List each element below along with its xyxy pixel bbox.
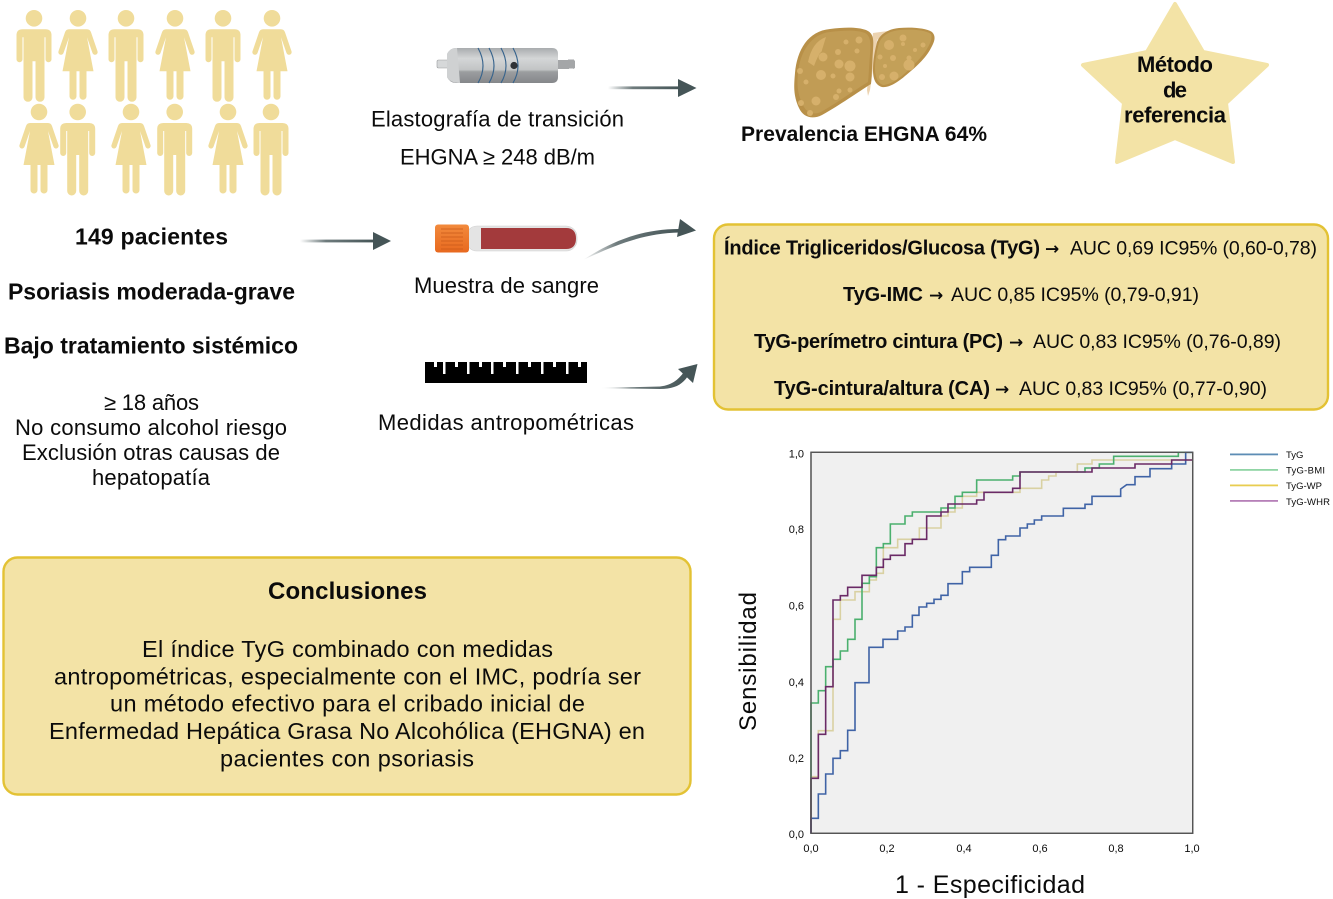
text: conclusions body: El índice TyG combinado con medidas [142, 636, 553, 662]
text: conclusions body: pacientes con psoriasis [220, 746, 474, 772]
text: conclusions body [49, 636, 645, 772]
text: exclusion criterion: Exclusión otras causas de [22, 440, 280, 465]
heading: conclusions: Conclusiones [268, 578, 427, 605]
x axis ticks: 0,2 [879, 843, 895, 855]
arrow: blood sample to indices [583, 219, 696, 260]
x axis ticks: 0,4 [956, 843, 972, 855]
star label: referencia [1124, 102, 1227, 128]
star label: de [1163, 78, 1187, 102]
text: NAFLD prevalence: Prevalencia EHGNA 64% [741, 123, 987, 146]
arrow: patients to blood sample [300, 232, 391, 250]
axis frame [811, 452, 1193, 833]
heading: patients: 149 pacientes [75, 224, 228, 250]
star label [1124, 52, 1227, 128]
icon: elastography transducer [437, 48, 575, 83]
result: TyG-IMC: → [929, 286, 943, 306]
y axis title: Sensibilidad [735, 592, 762, 731]
star label: Método [1137, 52, 1213, 77]
icon: woman 2 [155, 10, 195, 100]
panel: TyG index results [714, 224, 1328, 410]
x axis ticks: 1,0 [1184, 843, 1200, 855]
icon: woman 1 [58, 10, 98, 100]
text: conclusions body: antropométricas, especialmente con el IMC, podría ser [54, 664, 641, 690]
icon: woman 4 [19, 104, 59, 194]
y axis ticks: 0,6 [789, 600, 804, 612]
icon: man 4 [60, 104, 95, 195]
icon: man 3 [206, 10, 240, 102]
text: elastography label: EHGNA ≥ 248 dB/m [400, 144, 595, 170]
result: TyG-IMC [843, 284, 1199, 306]
arrow: anthropometrics to indices [600, 364, 698, 389]
arrow: elastography to liver [608, 79, 696, 97]
y axis ticks: 1,0 [789, 448, 804, 460]
y axis ticks: 0,2 [789, 753, 804, 765]
y axis ticks: 0,4 [789, 677, 804, 689]
legend item: TyG: TyG [1286, 450, 1303, 461]
x axis ticks [803, 843, 1200, 855]
result: TyG-CA: → [995, 380, 1009, 400]
icon: man 6 [254, 104, 288, 195]
icon: fatty liver [794, 28, 935, 117]
text: elastography label [371, 106, 624, 170]
icon: blood test tube [435, 224, 577, 252]
text: age criterion: ≥ 18 años [104, 390, 199, 415]
result: TyG: Índice Trigliceridos/Glucosa (TyG) [724, 236, 1040, 260]
y axis ticks: 0,0 [789, 829, 804, 841]
text: exclusion criterion continued: hepatopatía [92, 465, 211, 490]
result: TyG-PC [754, 331, 1281, 353]
curve: TyG [811, 452, 1193, 833]
result: TyG-IMC: TyG-IMC [843, 284, 923, 306]
icon: man 1 [16, 10, 52, 102]
star: reference method [1083, 4, 1267, 162]
y axis ticks [789, 448, 804, 841]
heading: treatment: Bajo tratamiento sistémico [4, 332, 298, 358]
curve: TyG-WP [811, 460, 1193, 833]
icon: man 2 [108, 10, 144, 102]
x axis ticks: 0,0 [803, 843, 819, 855]
x axis title: 1 - Especificidad [895, 871, 1085, 899]
text: blood sample label: Muestra de sangre [414, 273, 599, 298]
result: TyG-CA: AUC 0,83 IC95% (0,77-0,90) [1019, 378, 1267, 400]
x axis ticks: 0,8 [1108, 843, 1124, 855]
result: TyG-CA: TyG-cintura/altura (CA) [774, 378, 990, 400]
legend item: TyG-BMI: TyG-BMI [1286, 466, 1325, 476]
icon: man 5 [157, 104, 192, 195]
result: TyG-IMC: AUC 0,85 IC95% (0,79-0,91) [951, 284, 1199, 306]
curve: TyG-BMI [811, 452, 1193, 833]
result: TyG: AUC 0,69 IC95% (0,60-0,78) [1070, 238, 1317, 260]
icon: woman 5 [111, 104, 151, 194]
plot area [811, 452, 1193, 833]
text: elastography label: Elastografía de transición [371, 106, 624, 132]
x axis ticks: 0,6 [1032, 843, 1048, 855]
result: TyG-PC: → [1009, 333, 1023, 353]
result: TyG: → [1045, 240, 1059, 260]
chart: ROC curves [735, 448, 1200, 899]
text block: patient characteristics [4, 224, 298, 490]
legend item: TyG-WHR: TyG-WHR [1286, 497, 1330, 508]
star shape [1083, 4, 1267, 162]
result: TyG-PC: TyG-perímetro cintura (PC) [754, 331, 1003, 353]
text: conclusions body: Enfermedad Hepática Grasa No Alcohólica (EHGNA) en [49, 718, 645, 744]
legend item: TyG-WP: TyG-WP [1286, 481, 1322, 492]
icon: ruler [425, 362, 587, 383]
text: anthropometric label: Medidas antropométricas [378, 410, 634, 435]
icon group: patients [16, 10, 292, 195]
y axis ticks: 0,8 [789, 524, 804, 536]
icon: woman 6 [208, 104, 248, 194]
curve: TyG-WHR [811, 460, 1193, 833]
panel: conclusions [4, 558, 690, 794]
legend: ROC curves [1230, 450, 1330, 508]
result: TyG-CA [774, 378, 1267, 400]
icon: woman 3 [252, 10, 292, 100]
result: TyG [724, 236, 1317, 260]
text: conclusions body: un método efectivo para el cribado inicial de [110, 690, 585, 716]
heading: disease: Psoriasis moderada-grave [8, 278, 295, 304]
text: alcohol criterion: No consumo alcohol riesgo [15, 415, 287, 440]
result: TyG-PC: AUC 0,83 IC95% (0,76-0,89) [1033, 331, 1281, 353]
